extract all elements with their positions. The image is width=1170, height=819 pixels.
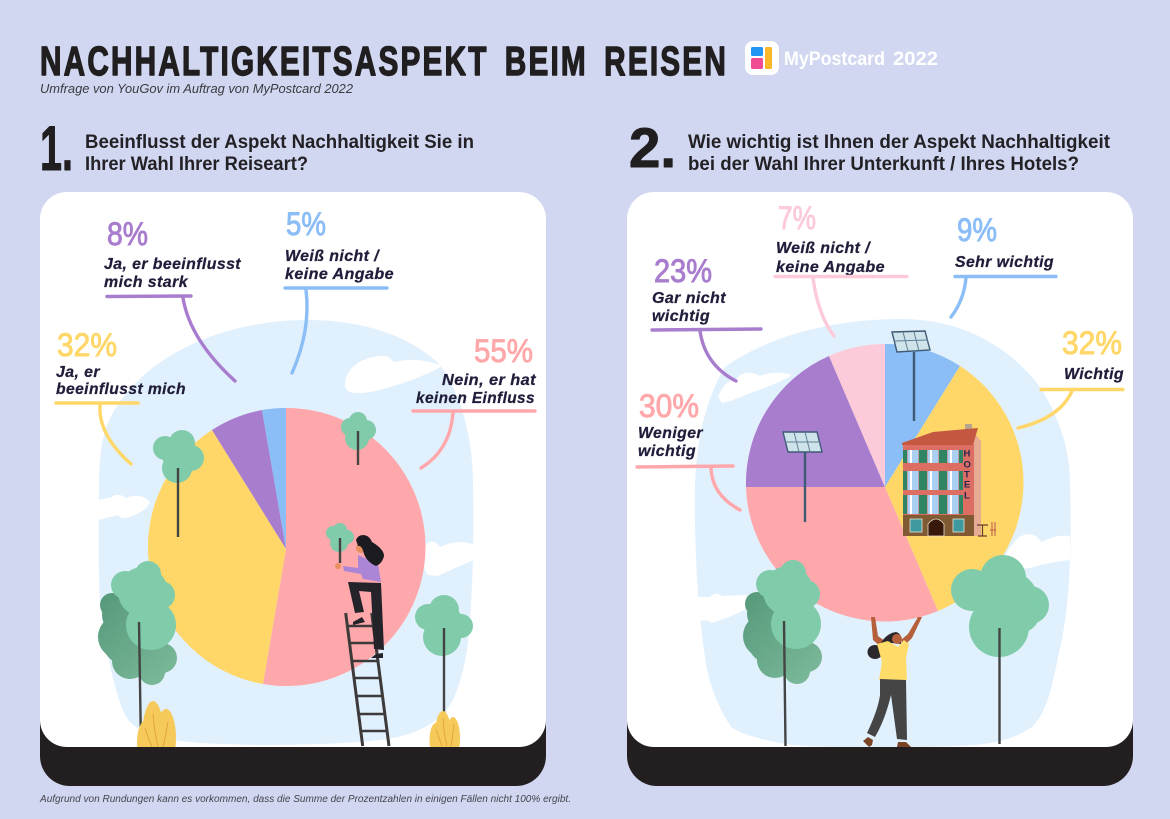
question 1: Beeinflusst der Aspekt Nachhaltigkeit Sie in [85, 132, 474, 153]
solar panel left [783, 432, 822, 522]
callout: 32% [56, 327, 186, 464]
callout: 32%: Wichtig [1064, 366, 1124, 383]
ladder [346, 613, 389, 746]
large tree left [743, 560, 822, 684]
pie chart: influence on travel type [148, 408, 425, 686]
callout: 23%: 23% [654, 253, 712, 289]
callout: 8%: Ja, er beeinflusst [104, 256, 241, 273]
question 2 [688, 132, 1111, 175]
icon: hotel building: T [964, 470, 970, 480]
right tree [415, 595, 473, 712]
logo: MyPostcard 2022: 2022 [893, 49, 938, 70]
icon: hotel building: E [964, 480, 970, 490]
callout: 30%: Weniger [638, 425, 704, 442]
icon: hotel building: H [964, 448, 970, 460]
icon: hotel building: L [964, 490, 970, 502]
sky blob [99, 320, 473, 745]
callout: 23%: wichtig [652, 308, 710, 325]
callout: 55%: Nein, er hat [442, 372, 536, 389]
callout: 32% [1018, 325, 1124, 428]
callout: 30% [637, 388, 740, 510]
panel: question 1 card [40, 192, 546, 786]
callout: 30%: 30% [639, 388, 699, 424]
solar panel top [892, 331, 930, 421]
question 1: Ihrer Wahl Ihrer Reiseart? [85, 154, 308, 175]
callout: 55% [413, 333, 536, 468]
callout: 5%: Weiß nicht / [285, 248, 380, 265]
callout: 55%: 55% [474, 333, 533, 369]
callout: 9% [951, 212, 1056, 317]
heading number 2: 2. [629, 116, 676, 179]
callout: 8%: mich stark [104, 274, 189, 291]
tree on pie left [153, 430, 204, 537]
question 1 [85, 132, 474, 175]
callout: 32%: 32% [1062, 325, 1122, 361]
logo: MyPostcard 2022 [745, 41, 938, 75]
ground strip [657, 747, 1103, 780]
clouds [697, 373, 1070, 623]
callout: 7%: Weiß nicht / [776, 240, 871, 257]
sky blob [695, 319, 1071, 747]
callout: 8% [104, 216, 241, 381]
callout: 32%: Ja, er [56, 364, 101, 381]
panel: question 2 card [627, 192, 1133, 786]
callout: 23% [652, 253, 761, 381]
question 2: Wie wichtig ist Ihnen der Aspekt Nachhaltigkeit [688, 132, 1111, 153]
question 2: bei der Wahl Ihrer Unterkunft / Ihres Hotels? [688, 154, 1079, 175]
callout: 9%: Sehr wichtig [955, 254, 1054, 271]
icon: hotel building: O [964, 460, 971, 470]
bush right [430, 711, 460, 765]
title: NACHHALTIGKEITSASPEKT BEIM REISEN [40, 38, 728, 84]
large tree left [98, 561, 177, 685]
bush left [137, 701, 176, 775]
callout: 32%: 32% [57, 327, 117, 363]
ground strip [70, 747, 516, 780]
callout: 7% [775, 200, 907, 336]
pie chart: importance for hotel choice [746, 344, 1024, 622]
callout: 32%: beeinflusst mich [56, 381, 186, 398]
clouds [98, 356, 474, 576]
callout: 8%: 8% [107, 216, 148, 252]
callout: 23%: Gar nicht [652, 290, 726, 307]
tree on pie right [341, 412, 376, 465]
callout: 5%: keine Angabe [285, 266, 394, 283]
woman on ladder with small tree [326, 523, 384, 658]
heading number 1: 1. [40, 114, 73, 184]
icon: hotel building [902, 424, 996, 536]
logo: MyPostcard 2022: MyPostcard [784, 49, 885, 70]
large tree right [951, 555, 1049, 744]
callout: 55%: keinen Einfluss [416, 390, 535, 407]
callout: 7%: 7% [778, 200, 816, 236]
callout: 30%: wichtig [638, 443, 696, 460]
callout: 5% [285, 206, 394, 373]
footnote: Aufgrund von Rundungen kann es vorkommen, dass die Summe der Prozentzahlen in einigen Fällen nicht 100% ergibt. [39, 794, 571, 805]
woman holding up pie [863, 617, 922, 747]
callout: 5%: 5% [286, 206, 326, 242]
callout: 7%: keine Angabe [776, 259, 885, 276]
subtitle: Umfrage von YouGov im Auftrag von MyPostcard 2022 [40, 81, 354, 96]
callout: 9%: 9% [957, 212, 997, 248]
